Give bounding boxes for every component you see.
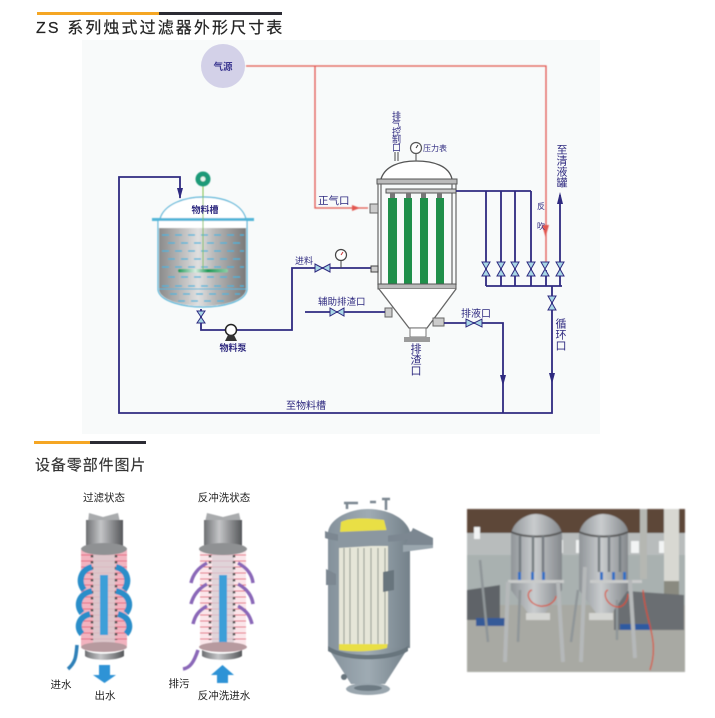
label: backblow: 反	[537, 201, 545, 211]
drain line	[444, 319, 506, 413]
label: backwash inlet: 反冲洗进水	[198, 689, 251, 702]
label: auxiliary drain port: 辅助排渣口	[318, 296, 366, 308]
top rule	[37, 12, 282, 15]
caption: 过滤状态	[83, 491, 125, 504]
label: to material tank: 至物料槽	[286, 399, 326, 412]
label: to clear liquid tank: 至清液罐	[555, 144, 568, 189]
label: drain port: 排液口	[461, 307, 491, 320]
label: feed: 进料	[295, 255, 313, 266]
label: sewage discharge: 排污	[168, 677, 190, 690]
return line to tank	[119, 177, 503, 413]
auxiliary drain line	[305, 308, 385, 316]
section heading: 设备零部件图片	[35, 457, 146, 474]
circulation line	[503, 286, 556, 413]
vessel cutaway render	[325, 499, 433, 695]
label: slag discharge port: 排渣口	[409, 342, 422, 376]
label: backblow	[537, 201, 545, 231]
twin vessels	[480, 514, 653, 670]
panel: process flow diagram	[82, 40, 600, 434]
title: ZS 系列烛式过滤器外形尺寸表	[36, 19, 284, 37]
valve manifold	[456, 191, 564, 286]
label: pump: 物料泵	[219, 342, 247, 353]
section rule	[34, 441, 146, 444]
label: circulation port: 循环口	[554, 318, 566, 351]
label: positive air port: 正气口	[318, 194, 350, 207]
material tank	[152, 172, 254, 307]
caption: 反冲洗状态	[198, 491, 251, 504]
red air lines	[246, 66, 549, 262]
filter element: backwash state	[168, 491, 253, 702]
label: pressure gauge: 压力表	[423, 143, 447, 153]
label: inlet: 进水	[50, 679, 72, 691]
feed pipeline with pump	[197, 250, 372, 341]
air source	[201, 44, 245, 88]
label: outlet: 出水	[94, 689, 116, 702]
air source: 气源	[213, 61, 233, 73]
label: tank: 物料槽	[191, 204, 219, 215]
filter element: filtering state	[50, 491, 129, 702]
label: vent control port: 排气控制口	[391, 110, 401, 152]
label: backblow: 吹	[537, 221, 545, 231]
site photo	[467, 509, 685, 672]
filter vessel	[370, 142, 457, 342]
